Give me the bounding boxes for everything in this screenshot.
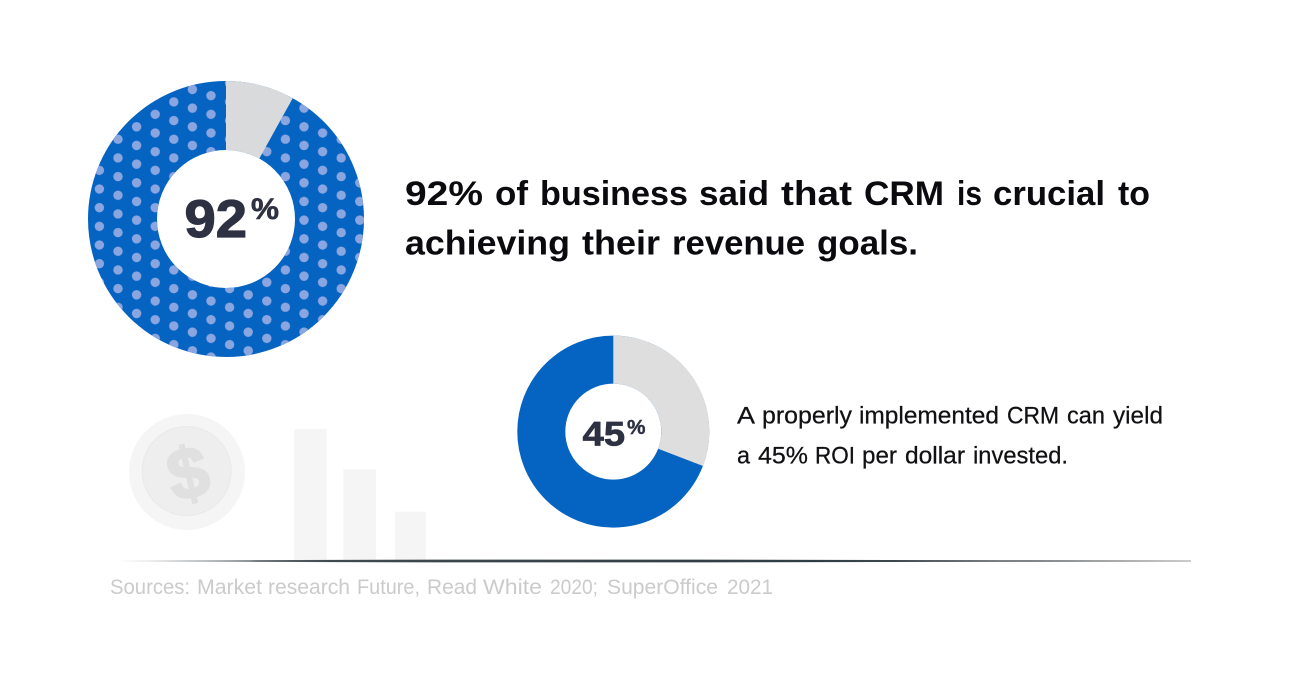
text block: ROI statement: a (737, 442, 751, 469)
text block: ROI statement: ROI (815, 442, 855, 469)
text block: ROI statement: can (1067, 402, 1105, 429)
heading: 92% statement: their (582, 224, 660, 262)
baseline rule (115, 560, 1191, 562)
background coin and bars illustration (129, 414, 426, 560)
text block: ROI statement (737, 402, 1163, 469)
sources note: research (268, 576, 350, 599)
text block: ROI statement: invested. (973, 442, 1068, 469)
sources note: White (483, 576, 542, 599)
heading: 92% statement: of (495, 175, 529, 213)
donut chart: 45% (541, 336, 709, 504)
donut chart: 45%: 45 (583, 416, 625, 454)
heading: 92% statement: CRM (864, 175, 944, 213)
sources note: 2020; (550, 576, 598, 599)
donut chart: 45%: % (627, 416, 646, 439)
text block: ROI statement: properly (762, 402, 852, 429)
heading: 92% statement: goals. (817, 224, 918, 262)
heading: 92% statement (405, 175, 1150, 262)
heading: 92% statement: revenue (672, 224, 805, 262)
text block: ROI statement: yield (1113, 402, 1163, 429)
heading: 92% statement: business (540, 175, 688, 213)
heading: 92% statement: is (957, 175, 982, 213)
icon: descending bars (294, 429, 426, 560)
heading: 92% statement: 92% (405, 175, 483, 213)
text block: ROI statement: per (862, 442, 897, 469)
donut chart: 92%: 92 (184, 190, 247, 249)
heading: 92% statement: crucial (993, 175, 1105, 213)
text block: ROI statement: implemented (859, 402, 999, 429)
donut chart: 92% (122, 81, 330, 322)
heading: 92% statement: that (781, 175, 852, 213)
icon: dollar coin: $ (160, 430, 217, 517)
sources note: Read (427, 576, 477, 599)
heading: 92% statement: to (1118, 175, 1150, 213)
heading: 92% statement: said (699, 175, 769, 213)
text block: ROI statement: dollar (905, 442, 965, 469)
text block: ROI statement: A (737, 402, 755, 429)
sources note: 2021 (727, 576, 773, 599)
text block: ROI statement: CRM (1007, 402, 1059, 429)
icon: dollar coin (129, 414, 245, 530)
sources note: Sources: (110, 576, 190, 599)
donut chart: 92%: % (251, 193, 279, 226)
sources note (110, 576, 773, 599)
sources note: Market (197, 576, 262, 599)
sources note: Future, (357, 576, 420, 599)
text block: ROI statement: 45% (758, 442, 808, 469)
sources note: SuperOffice (607, 576, 718, 599)
heading: 92% statement: achieving (405, 224, 570, 262)
